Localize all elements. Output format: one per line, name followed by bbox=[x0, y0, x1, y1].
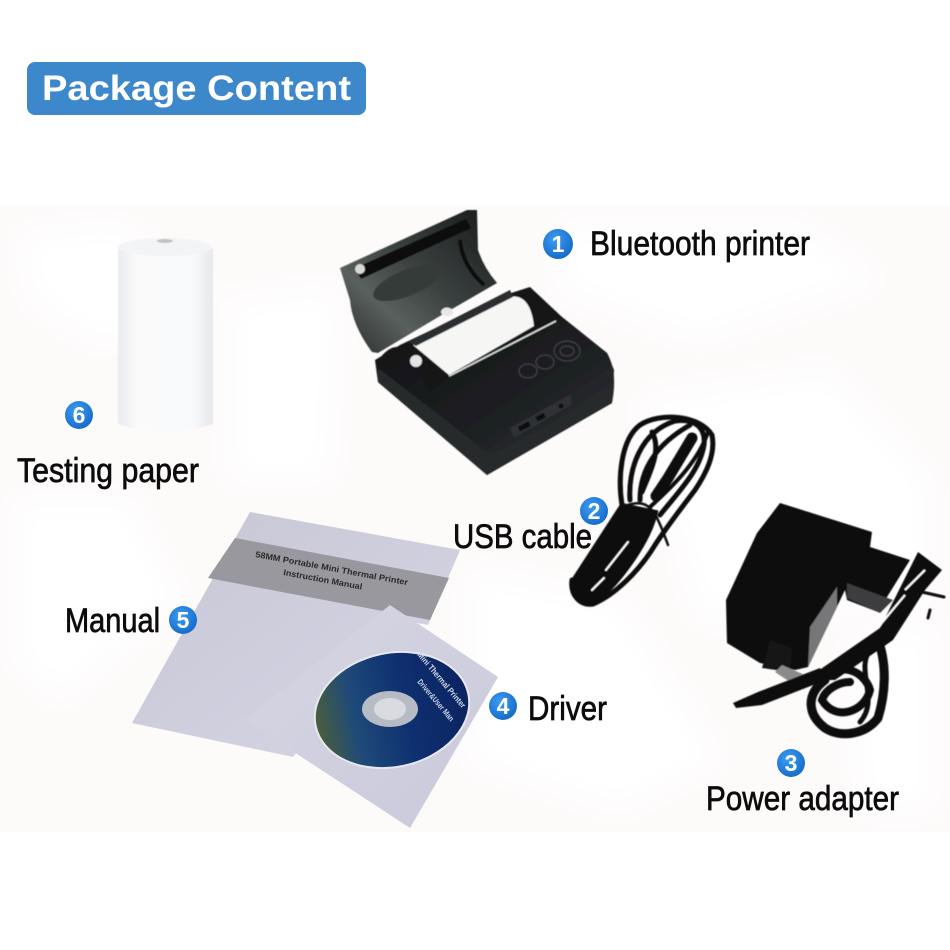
manual title band bbox=[208, 538, 449, 620]
label 5: Manual: Manual bbox=[65, 602, 160, 640]
label 6: Testing paper: 6 bbox=[73, 402, 85, 428]
adapter cord bundle bbox=[805, 552, 942, 680]
driver disc bbox=[304, 638, 480, 782]
printer ports bbox=[510, 394, 571, 438]
printer lid bbox=[340, 210, 497, 353]
icon: manual bbox=[132, 512, 460, 757]
label 4: Driver bbox=[489, 690, 607, 728]
label 4: Driver: 4 bbox=[497, 693, 510, 719]
icon: bluetooth printer bbox=[340, 210, 614, 475]
manual title band: Instruction Manual bbox=[283, 567, 363, 592]
driver disc: Mini Thermal Printer bbox=[415, 650, 468, 710]
printer paper roll bbox=[413, 296, 534, 375]
printer front body bbox=[377, 317, 614, 475]
label 5: Manual: 5 bbox=[177, 607, 190, 633]
icon: driver CD sleeve bbox=[245, 605, 498, 828]
printer buttons bbox=[519, 341, 580, 378]
label 1: Bluetooth printer: Bluetooth printer bbox=[590, 225, 810, 263]
driver disc: Driver&User Man bbox=[415, 678, 456, 723]
icon: power adapter bbox=[726, 503, 944, 734]
label 2: USB cable: USB cable bbox=[453, 518, 592, 556]
label 1: Bluetooth printer: 1 bbox=[552, 231, 565, 257]
label 6: Testing paper: Testing paper bbox=[17, 452, 199, 490]
label 2: USB cable: 2 bbox=[588, 498, 600, 524]
label 6: Testing paper bbox=[17, 401, 199, 490]
icon: paper roll bbox=[118, 238, 213, 432]
heading: Package Content bbox=[27, 62, 366, 115]
heading: Package Content: Package Content bbox=[42, 69, 351, 108]
manual title band: 58MM Portable Mini Thermal Printer bbox=[255, 549, 410, 587]
label 3: Power adapter: 3 bbox=[785, 750, 797, 776]
label 2: USB cable bbox=[453, 497, 608, 556]
icon: USB cable bbox=[572, 417, 713, 604]
label 4: Driver: Driver bbox=[528, 690, 607, 728]
label 3: Power adapter bbox=[706, 749, 899, 818]
printer base bbox=[375, 287, 614, 475]
label 3: Power adapter: Power adapter bbox=[706, 780, 899, 818]
